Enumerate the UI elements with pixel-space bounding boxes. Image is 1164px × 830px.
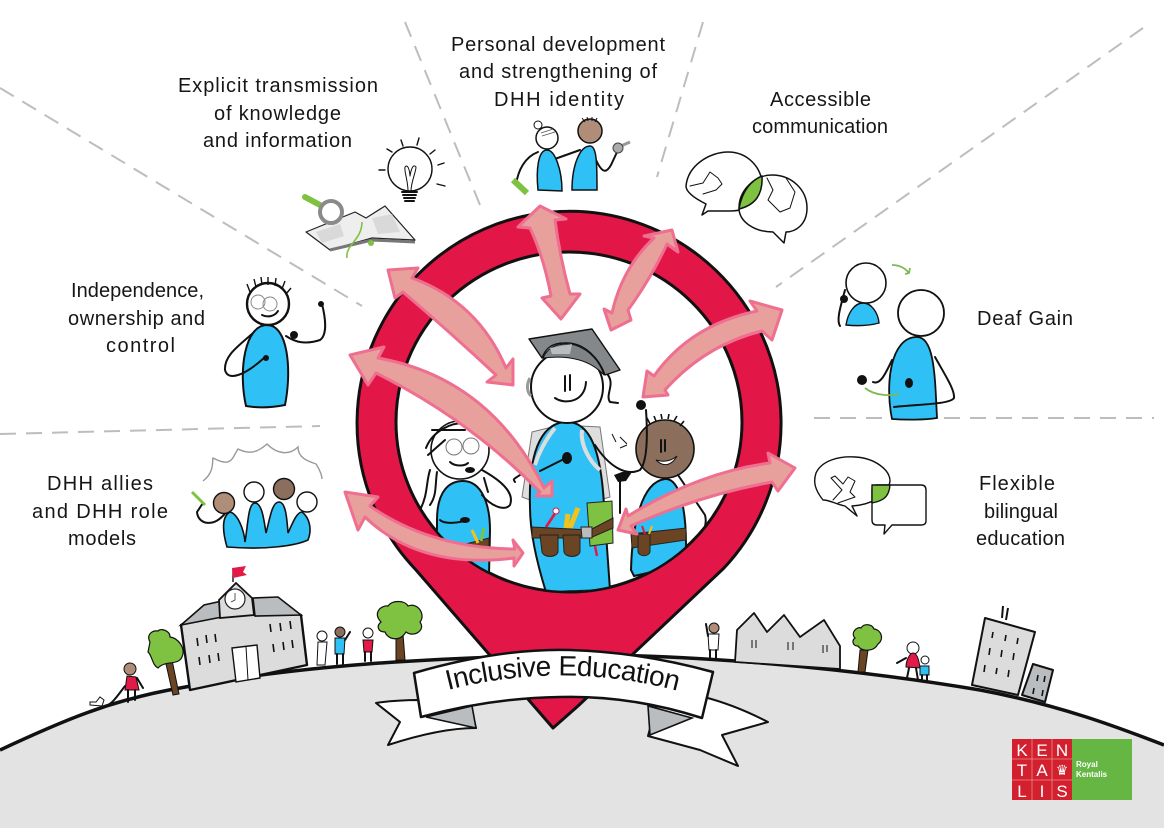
heading: explicit transmission: Explicit transmission (178, 75, 378, 97)
logo: Royal Kentalis: K (1016, 741, 1028, 760)
logo: Royal Kentalis: S (1056, 782, 1068, 801)
banner: Inclusive Education (375, 648, 769, 767)
heading: DHH allies: and DHH role (32, 501, 168, 523)
arrow: DHH allies (345, 492, 523, 566)
heading: DHH allies: models (68, 528, 136, 550)
heading: explicit transmission (178, 75, 378, 152)
logo: Royal Kentalis: Royal (1076, 760, 1098, 769)
heading: flexible bilingual education: education (976, 528, 1065, 550)
logo: Royal Kentalis (1012, 739, 1132, 801)
arrow: flexible bilingual education (618, 453, 795, 534)
logo: Royal Kentalis: T (1017, 761, 1027, 780)
heading: accessible communication: Accessible (770, 89, 871, 111)
student right (620, 414, 706, 576)
heading: independence (68, 280, 205, 357)
city buildings (972, 606, 1053, 702)
heading: personal development: DHH identity (494, 89, 624, 111)
ground hill (0, 655, 1164, 828)
heading: DHH allies: DHH allies (47, 473, 153, 495)
heading: independence: Independence, (71, 280, 204, 302)
heading: DHH allies (32, 473, 168, 550)
school building (181, 566, 307, 690)
heading: explicit transmission: of knowledge (214, 103, 341, 125)
heading: explicit transmission: and information (203, 130, 352, 152)
logo: Royal Kentalis: I (1040, 782, 1044, 801)
heading: independence: ownership and (68, 308, 205, 330)
icon: two friends with whistle and pen (513, 117, 630, 193)
factory and people right (706, 613, 929, 680)
icon: flexible speech bubbles (815, 457, 926, 534)
icon: independence figure (225, 277, 325, 407)
student left (420, 421, 511, 575)
arrow: personal development (518, 206, 580, 319)
arrow: explicit transmission (388, 268, 513, 385)
three students in pin (420, 329, 706, 592)
arrow: deaf gain (643, 301, 782, 397)
heading: personal development (451, 34, 665, 111)
heading: flexible bilingual education: bilingual (984, 501, 1058, 523)
arrows between themes and students (345, 206, 795, 566)
heading: personal development: Personal development (451, 34, 665, 56)
logo: Royal Kentalis: L (1017, 782, 1027, 801)
logo: Royal Kentalis: ♛ (1056, 763, 1068, 779)
heading: accessible communication (752, 89, 888, 138)
heading: accessible communication: communication (752, 116, 888, 138)
heading: independence: control (106, 335, 175, 357)
icon: light bulb (379, 138, 445, 201)
arrow: independence (350, 347, 552, 496)
arrow: accessible communication (604, 230, 678, 330)
heading: flexible bilingual education (976, 473, 1065, 550)
icon: open book with magnifier (305, 197, 415, 258)
icon: overlapping speech bubbles with hands (686, 152, 807, 243)
trees and people left (90, 602, 422, 706)
logo: Royal Kentalis: A (1036, 761, 1048, 780)
logo: Royal Kentalis: N (1056, 741, 1068, 760)
icon: DHH allies group (192, 444, 322, 548)
map pin (357, 211, 781, 728)
icon: Deaf Gain figures (839, 263, 954, 420)
logo: Royal Kentalis: Kentalis (1076, 770, 1108, 779)
heading: deaf gain: Deaf Gain (977, 308, 1073, 330)
heading: flexible bilingual education: Flexible (979, 473, 1055, 495)
banner: Inclusive Education: Inclusive Education (446, 656, 678, 690)
logo: Royal Kentalis: E (1036, 741, 1048, 760)
heading: personal development: and strengthening of (459, 61, 657, 83)
backpack and centre student (514, 329, 647, 592)
